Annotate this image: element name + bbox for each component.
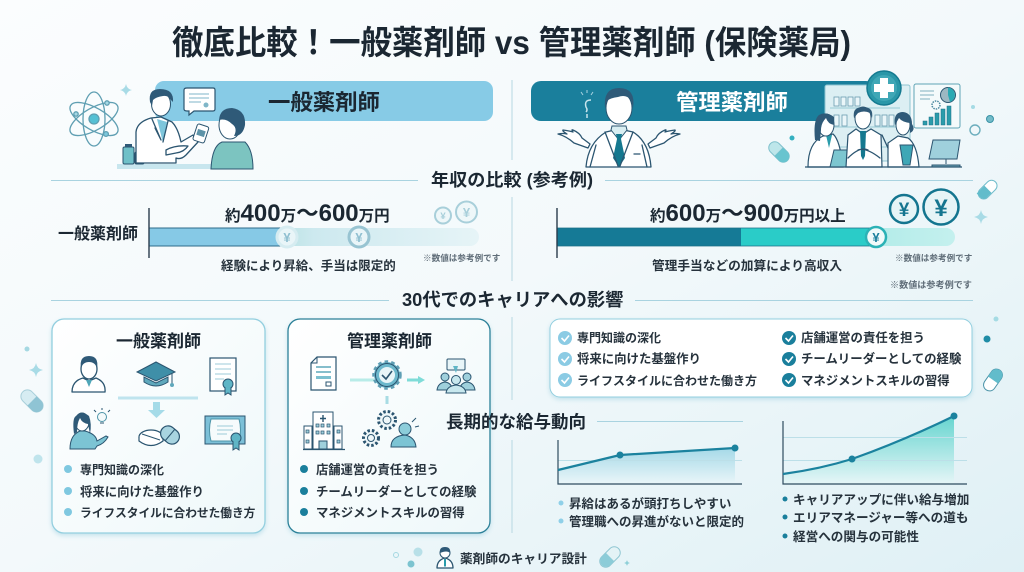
section heading: career impact in 30s: 30代でのキャリアへの影響 [402,289,623,310]
icon: team with speech bubble [437,359,475,393]
heading: long-term salary trend: 長期的な給与動向 [446,412,586,432]
footer [394,544,630,570]
illustration: pharmacist and patient [117,88,253,169]
text: general pharmacist trend notes [558,496,744,529]
income chart: general pharmacist: 経験により昇給、手当は限定的 [221,258,396,273]
bullet list [64,462,256,520]
icon: diploma [205,416,245,450]
income chart: general pharmacist [58,200,501,273]
footer text: 薬剤師のキャリア設計 [460,551,587,566]
banner: managing pharmacist: 管理薬剤師 [676,90,788,115]
checklist: general: 将来に向けた基盤作り [577,351,701,366]
panel: comparison checklist [550,319,972,397]
panel: managing pharmacist career [288,319,490,533]
panel: general pharmacist career [52,319,265,533]
income chart: managing pharmacist: ※数値は参考例です [895,252,973,263]
bullet list: マネジメントスキルの習得 [316,505,465,520]
icon: sparkle [624,560,630,566]
arrows: process [350,376,425,404]
income chart: general pharmacist: ¥ [440,211,446,222]
illustration: team with pharmacy shelves [805,71,962,167]
bullet list: 専門知識の深化 [80,462,164,477]
icon: document [311,357,336,390]
decorations: upper right pills and dots [766,105,999,224]
icon: woman with light bulb [70,408,110,449]
text: general pharmacist trend notes: 昇給はあるが頭打ちしやすい [569,496,731,511]
icon: graduation cap [137,362,175,387]
icon: tablets [139,423,182,447]
income chart: general pharmacist: ¥ [355,230,363,245]
checklist: manager: マネジメントスキルの習得 [801,373,950,388]
bullet list: チームリーダーとしての経験 [316,484,477,499]
text: managing pharmacist trend notes [782,492,969,544]
title: 徹底比較！一般薬剤師 vs 管理薬剤師 (保険薬局) [172,25,851,62]
income chart: managing pharmacist [557,190,973,290]
checklist: manager: 店舗運営の責任を担う [801,330,925,345]
banner: managing pharmacist [531,81,876,121]
text: general pharmacist trend notes: 管理職への昇進がないと限定的 [569,514,744,529]
income chart: general pharmacist: 一般薬剤師 [58,225,138,243]
income chart: general pharmacist: ※数値は参考例です [423,252,501,263]
decorations: left side [18,346,46,464]
panel heading: 管理薬剤師 [347,331,432,351]
text: managing pharmacist trend notes: エリアマネージャー等への道も [793,510,968,525]
income chart: managing pharmacist: 約600万～900万円以上 [650,200,846,227]
footer dots [394,548,422,568]
bullet list: 将来に向けた基盤作り [80,484,204,499]
icon: certificate document [210,358,236,395]
icon: sparkle [120,84,132,96]
banner: general pharmacist [155,81,493,121]
checklist: general [558,330,757,388]
decorations: right side [981,316,1005,393]
checklist: manager [782,330,962,388]
icon: gears and person [364,412,419,447]
income chart: managing pharmacist: ※数値は参考例です [890,279,972,290]
income chart: managing pharmacist: ¥ [899,200,910,221]
income chart: general pharmacist: 約400万～600万円 [225,200,390,227]
arrow: down [118,398,198,418]
bullet list [300,462,477,520]
line chart: general pharmacist salary [558,440,742,484]
icon: pharmacist bust [72,356,105,392]
line chart: managing pharmacist salary [783,412,967,484]
text: managing pharmacist trend notes: 経営への関与の可能性 [793,529,919,544]
icon: hospital [303,412,345,450]
income chart: managing pharmacist: ¥ [934,195,948,222]
illustration: manager pharmacist [558,88,680,167]
income chart: managing pharmacist: 管理手当などの加算により高収入 [652,258,842,273]
banner: general pharmacist: 一般薬剤師 [268,90,380,115]
bullet list: 店舗運営の責任を担う [316,462,439,477]
icon: pharmacist [437,547,453,568]
center divider [511,80,513,533]
icon: atom [65,92,123,146]
income chart: general pharmacist: ¥ [463,205,471,220]
icon: pill [597,544,623,570]
income chart: general pharmacist: ¥ [283,230,291,245]
section heading: annual income comparison: 年収の比較 (参考例) [431,170,593,190]
icon: gear with check [374,362,400,388]
panel heading: 一般薬剤師 [116,332,201,351]
checklist: general: ライフスタイルに合わせた働き方 [577,373,757,388]
income chart: managing pharmacist: ¥ [872,230,880,245]
checklist: general: 専門知識の深化 [577,330,661,345]
text: managing pharmacist trend notes: キャリアアップに伴い給与増加 [793,492,969,507]
checklist: manager: チームリーダーとしての経験 [801,351,962,366]
bullet list: ライフスタイルに合わせた働き方 [80,506,256,520]
